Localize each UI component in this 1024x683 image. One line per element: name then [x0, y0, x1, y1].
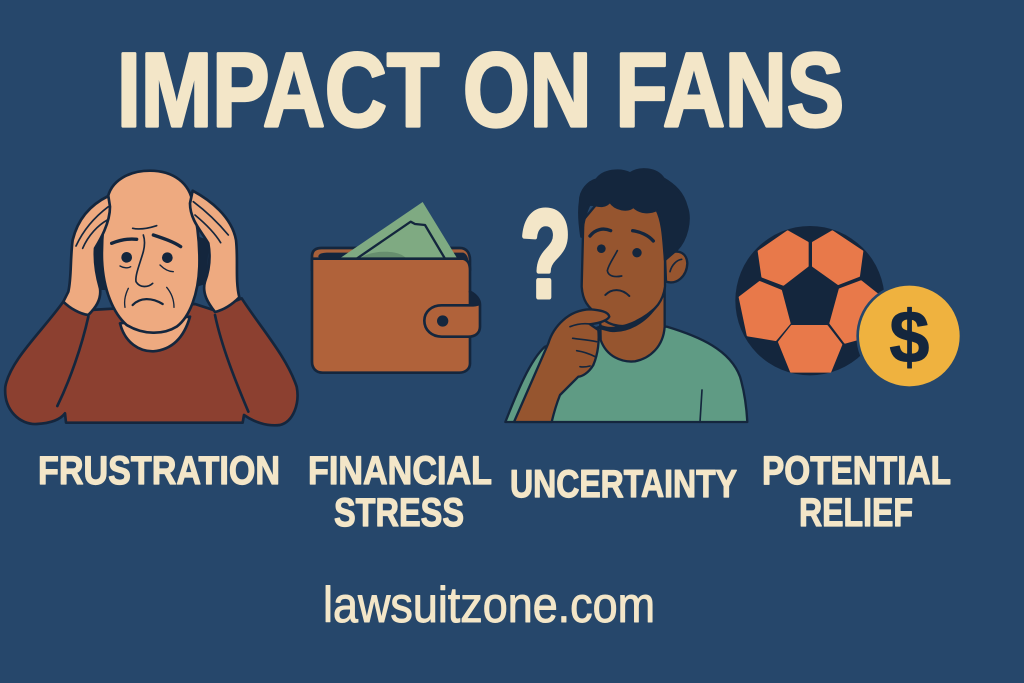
clasp button [437, 315, 448, 327]
ball panels [740, 231, 880, 372]
wallet front [312, 259, 470, 373]
label: financial stress [308, 449, 492, 535]
man's head [102, 171, 199, 333]
neck [600, 287, 665, 362]
icon: thinking man with question mark [505, 169, 747, 422]
banknote [339, 202, 457, 259]
label: potential relief: POTENTIAL [762, 449, 951, 493]
man's sweater [5, 298, 298, 425]
label: potential relief: RELIEF [799, 491, 913, 535]
icon: wallet with cash [312, 202, 480, 373]
icon: soccer ball with dollar coin [735, 226, 961, 388]
head [582, 200, 665, 326]
jaw shadow [598, 304, 658, 332]
label: financial stress: FINANCIAL [308, 449, 492, 493]
dollar sign: $ [889, 296, 929, 379]
website address: lawsuitzone.com [323, 577, 655, 633]
man's neck [120, 317, 190, 351]
t-shirt [505, 327, 747, 422]
sweater seams and finger lines [57, 202, 248, 412]
label: uncertainty: UNCERTAINTY [510, 463, 737, 506]
hand and forearm [514, 309, 609, 422]
icon: frustrated man holding his head [5, 171, 298, 425]
ball [735, 226, 885, 375]
clasp strap [424, 292, 480, 337]
man's right hand [190, 191, 239, 312]
eyebrows, eyes, nose and mouth [590, 229, 653, 296]
icon: question mark: ? [520, 186, 571, 324]
ear [665, 252, 687, 282]
dark gaps behind ears [95, 237, 208, 290]
title: IMPACT ON FANS [117, 32, 844, 149]
hair [579, 169, 689, 260]
label: potential relief [762, 449, 951, 535]
label: frustration: FRUSTRATION [38, 449, 280, 493]
dollar coin [858, 284, 961, 388]
label: financial stress: STRESS [334, 491, 464, 535]
man's facial features [112, 226, 181, 307]
shirt sleeve fold [700, 390, 702, 422]
man's left hand [63, 196, 110, 315]
wallet back [312, 248, 470, 270]
